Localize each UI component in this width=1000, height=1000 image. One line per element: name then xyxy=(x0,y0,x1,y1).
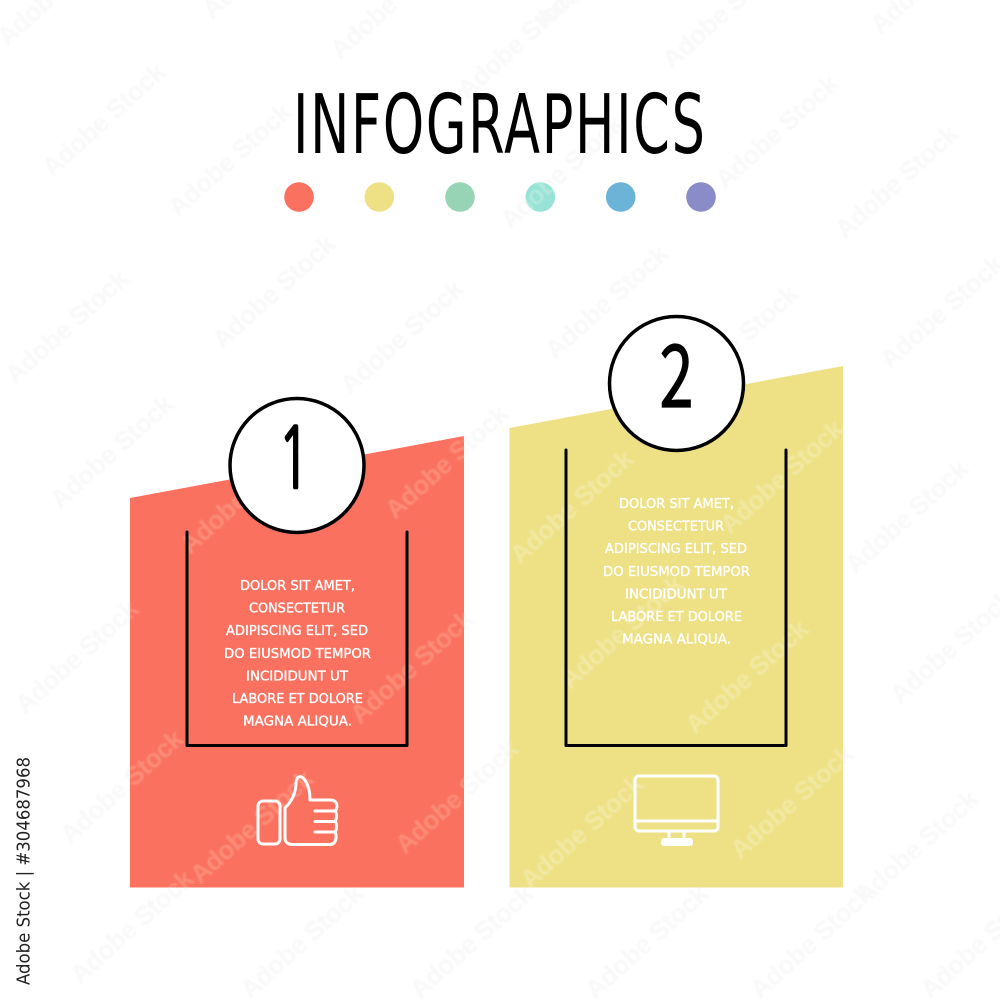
watermark pattern on white: Adobe Stock xyxy=(0,263,135,389)
text block 2: MAGNA ALIQUA. xyxy=(622,632,731,648)
text block 2: LABORE ET DOLORE xyxy=(611,609,742,625)
watermark pattern on white: Adobe Stock xyxy=(679,613,815,739)
bracket 2 xyxy=(566,450,786,746)
watermark pattern on white: Adobe Stock xyxy=(184,763,320,889)
text block 1: DO EIUSMOD TEMPOR xyxy=(224,646,371,662)
text block 1: INCIDIDUNT UT xyxy=(246,668,349,684)
text block 2: CONSECTETUR xyxy=(628,519,724,535)
title: INFOGRAPHICS xyxy=(293,78,707,173)
text block 1: DOLOR SIT AMET, xyxy=(240,578,355,594)
text block 2: ADIPISCING ELIT, SED xyxy=(605,541,747,557)
watermark pattern on white: Adobe Stock xyxy=(379,398,515,524)
bracket 1 xyxy=(187,532,407,746)
watermark pattern on white: Adobe Stock xyxy=(54,723,190,849)
watermark pattern on white: Adobe Stock xyxy=(849,783,985,909)
text block 1: CONSECTETUR xyxy=(249,601,345,617)
watermark pattern on white: Adobe Stock xyxy=(36,56,172,182)
watermark pattern on white: Adobe Stock xyxy=(539,238,675,364)
watermark pattern on white: Adobe Stock xyxy=(162,96,298,222)
watermark pattern on white: Adobe Stock xyxy=(839,453,975,579)
panel: step 1 xyxy=(130,398,464,888)
text block 2: DO EIUSMOD TEMPOR xyxy=(603,564,750,580)
icon: desktop monitor xyxy=(635,776,718,846)
watermark pattern on white: Adobe Stock xyxy=(174,433,310,559)
watermark pattern on white: Adobe Stock xyxy=(494,108,630,234)
panel: step 2 xyxy=(510,307,843,888)
watermark pattern on white: Adobe Stock xyxy=(514,768,650,894)
text block 2: INCIDIDUNT UT xyxy=(625,586,728,602)
watermark pattern on white: Adobe Stock xyxy=(829,118,965,244)
text block 2 xyxy=(603,496,750,648)
text block 1 xyxy=(224,578,371,730)
text block 1: MAGNA ALIQUA. xyxy=(243,714,352,730)
watermark pattern on white: Adobe Stock xyxy=(709,68,845,194)
panel 2 background xyxy=(510,366,843,888)
watermark pattern on white: Adobe Stock xyxy=(334,273,470,399)
watermark pattern on white: Adobe Stock xyxy=(554,568,690,694)
stock id side label: Adobe Stock | #304687968 xyxy=(14,757,34,985)
text block 1: LABORE ET DOLORE xyxy=(232,691,363,707)
number badge 2: 2 xyxy=(660,307,694,433)
number badge 1: 1 xyxy=(278,417,310,501)
icon: thumbs up xyxy=(258,777,337,845)
text block 2: DOLOR SIT AMET, xyxy=(619,496,734,512)
number badge 1 xyxy=(230,398,364,532)
watermark pattern on white: Adobe Stock xyxy=(724,738,860,864)
watermark pattern on white: Adobe Stock xyxy=(669,278,805,404)
watermark pattern on white: Adobe Stock xyxy=(504,443,640,569)
watermark pattern on white: Adobe Stock xyxy=(64,863,200,989)
colour dots row xyxy=(284,182,716,212)
watermark pattern on white: Adobe Stock xyxy=(9,593,145,719)
panel 1 background xyxy=(130,436,464,888)
watermark pattern on white: Adobe Stock xyxy=(44,388,180,514)
watermark pattern on white: Adobe Stock xyxy=(344,603,480,729)
text block 1: ADIPISCING ELIT, SED xyxy=(226,623,368,639)
watermark pattern on white: Adobe Stock xyxy=(714,413,850,539)
watermark pattern on white: Adobe Stock xyxy=(389,733,525,859)
watermark pattern on white: Adobe Stock xyxy=(206,228,342,354)
number badge 2 xyxy=(610,307,744,450)
